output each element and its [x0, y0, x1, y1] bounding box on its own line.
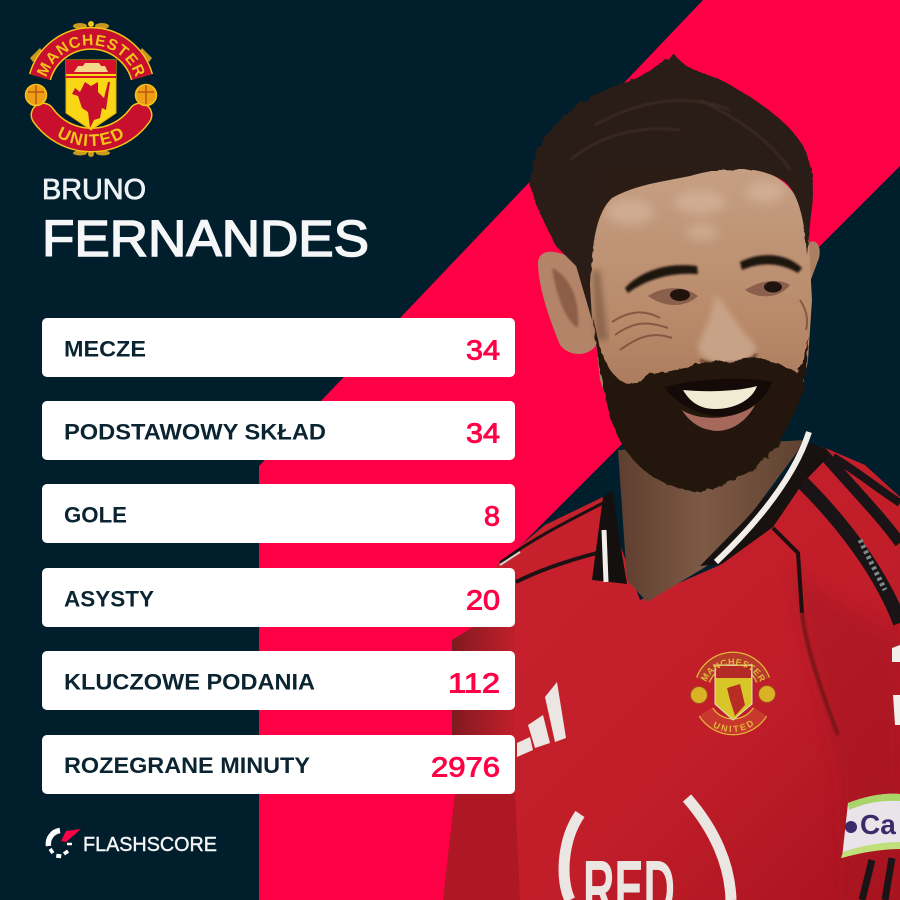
stats row: Rozegrane minuty	[42, 735, 515, 794]
stats row: Kluczowe podania: 112	[448, 668, 500, 698]
jersey shading	[443, 528, 900, 900]
stats row: Rozegrane minuty: 2976	[431, 752, 500, 782]
ear inner shadow	[552, 268, 578, 328]
stats row: Asysty: 20	[466, 584, 500, 616]
crest bottom banner	[43, 115, 140, 140]
hair edge	[530, 55, 813, 280]
club crest: Manchester United	[24, 21, 158, 157]
stats row: Kluczowe podania	[42, 651, 515, 710]
cheek shadow	[592, 270, 608, 340]
jersey crest: UNITED	[714, 720, 753, 732]
crest footballs	[26, 84, 156, 106]
Flashscore logo	[48, 829, 217, 858]
stats row: Gole: 8	[484, 500, 500, 532]
player surname: FERNANDES	[42, 210, 369, 267]
club crest: Manchester United: MANCHESTER	[36, 34, 144, 78]
stats row: Podstawowy skład: PODSTAWOWY SKŁAD	[64, 420, 326, 444]
jersey side sponsor marks	[892, 645, 900, 725]
captain armband: Ca	[860, 809, 896, 840]
stats row: Asysty: ASYSTY	[64, 586, 154, 612]
jersey crest: MANCHESTER	[700, 658, 765, 682]
mouth	[664, 379, 772, 431]
stats row: Gole	[42, 484, 515, 543]
sleeve cuff stripes	[862, 858, 892, 900]
lower lip	[682, 405, 755, 431]
stats row: Mecze: MECZE	[64, 336, 146, 362]
lower beard fill	[615, 375, 795, 484]
club crest: Manchester United: UNITED	[58, 126, 123, 146]
eye right	[745, 281, 790, 296]
player photo	[443, 54, 900, 900]
hair highlights	[570, 100, 790, 170]
collar	[592, 432, 830, 584]
ear left	[538, 252, 596, 354]
right shoulder stripes	[803, 450, 900, 623]
ear right	[803, 241, 820, 282]
face	[585, 164, 812, 488]
stats row: Podstawowy skład	[42, 401, 515, 460]
adidas logo	[517, 682, 566, 757]
stats row: Mecze	[42, 318, 515, 377]
crest shield	[66, 60, 116, 130]
stats row: Gole: GOLE	[64, 502, 127, 528]
nose	[698, 295, 757, 366]
player first name: BRUNO	[42, 174, 146, 206]
crow's feet wrinkles	[612, 300, 807, 350]
background: pink diagonal shape	[259, 0, 900, 900]
forehead shine	[606, 181, 785, 240]
crest ship	[74, 63, 108, 72]
stats row: Rozegrane minuty: ROZEGRANE MINUTY	[64, 753, 310, 778]
eyebrow right	[740, 255, 802, 273]
hair base	[532, 60, 813, 320]
captain armband	[841, 794, 900, 858]
stats row: Asysty	[42, 568, 515, 627]
stats row: Mecze: 34	[466, 334, 500, 366]
eye left	[648, 288, 698, 305]
left shoulder stripes	[500, 503, 603, 582]
logo wordmark: FLASHSCORE	[83, 834, 217, 856]
jersey body	[443, 447, 900, 900]
crest red devil	[72, 82, 110, 128]
logo gauge	[48, 830, 72, 858]
beard	[592, 315, 808, 492]
crest top ornaments	[30, 21, 152, 157]
eyebrow left	[625, 265, 698, 293]
neck	[618, 440, 806, 602]
logo red wing	[61, 829, 81, 842]
crest top banner	[40, 38, 142, 77]
teeth	[683, 386, 757, 409]
stats row: Kluczowe podania: KLUCZOWE PODANIA	[64, 670, 315, 694]
stats row: Podstawowy skład: 34	[466, 418, 500, 448]
RED print on jersey	[564, 798, 731, 900]
jersey crest	[690, 652, 776, 736]
